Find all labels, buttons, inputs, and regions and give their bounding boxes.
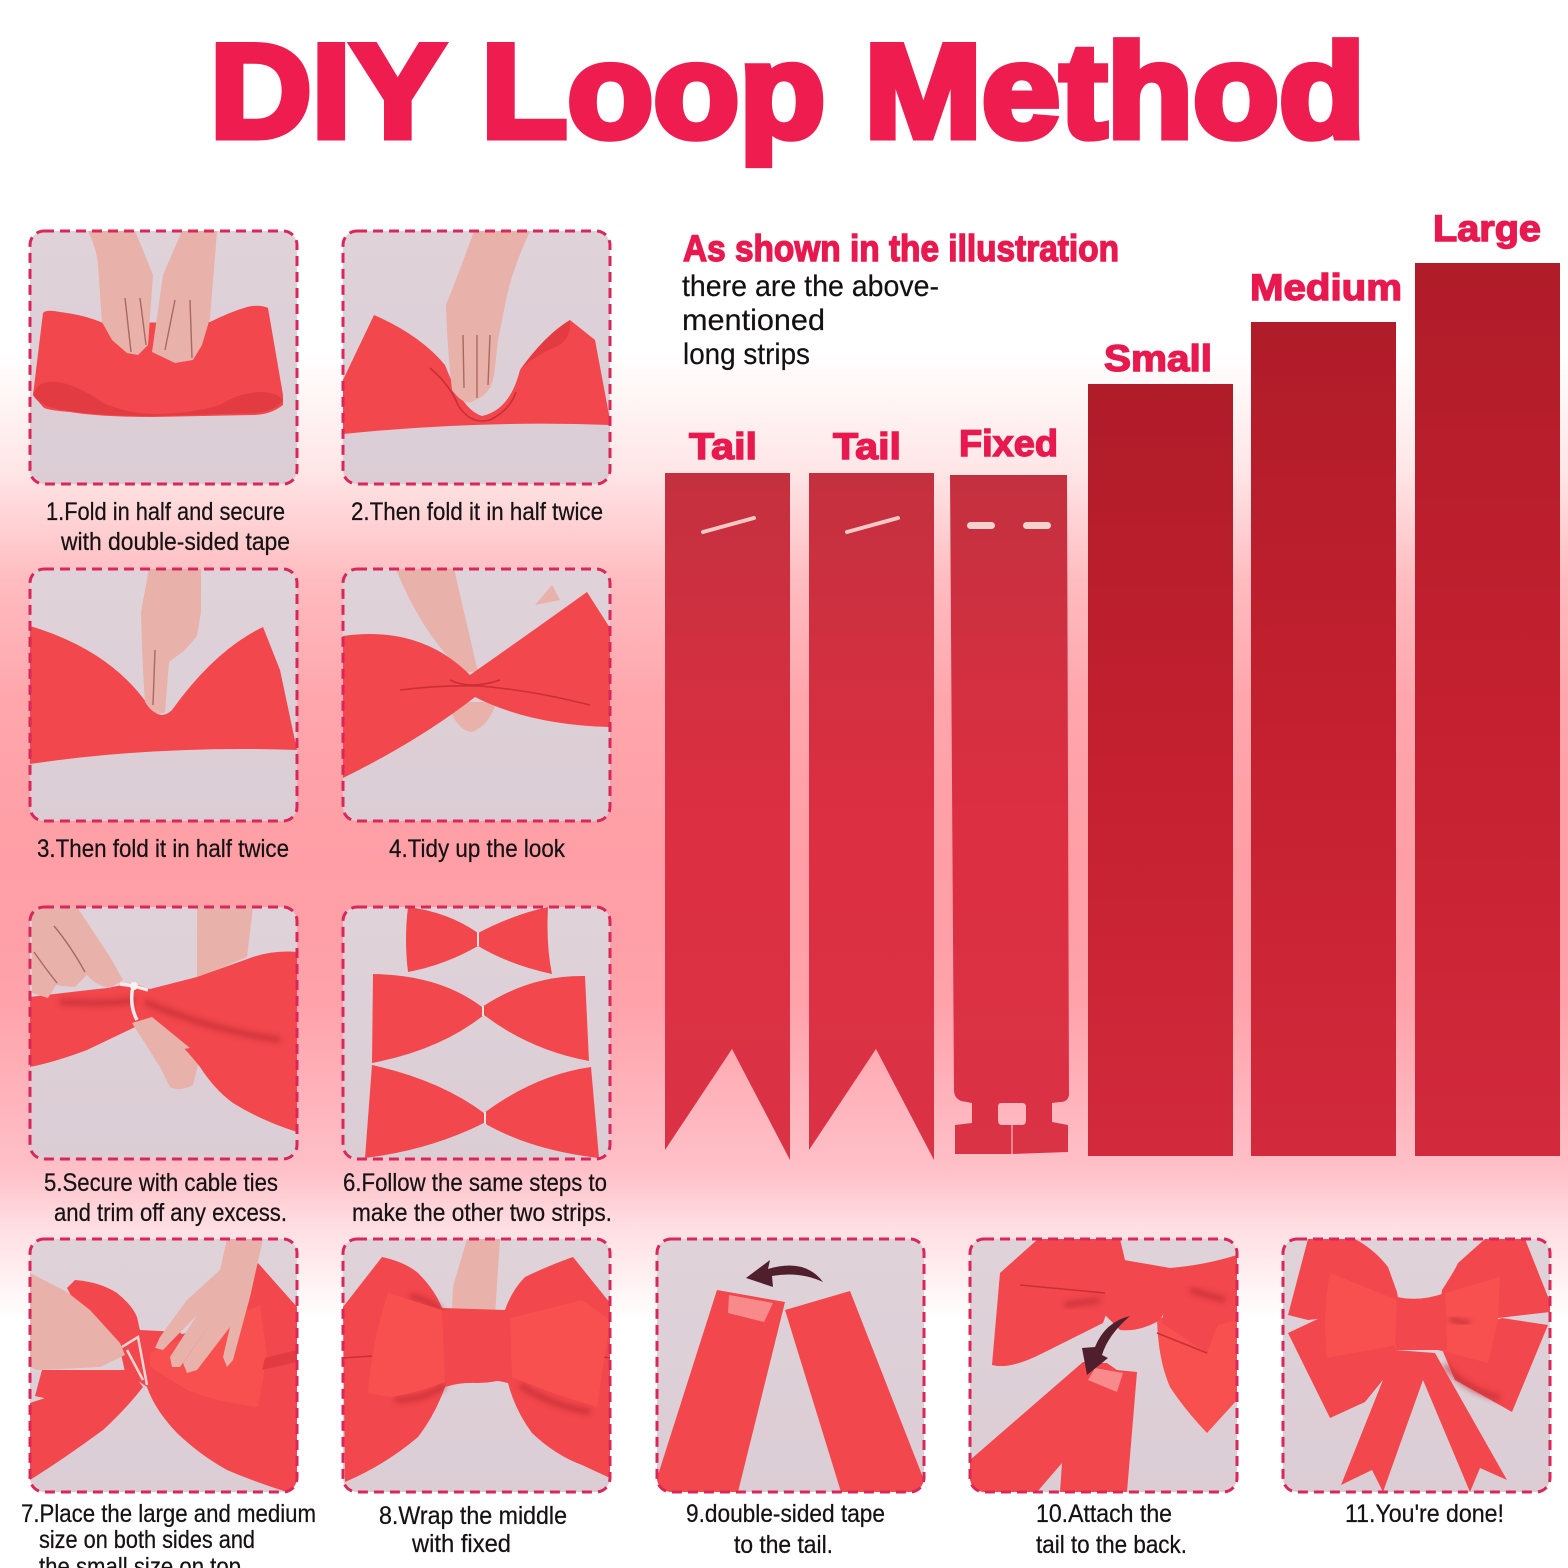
strip: fixed: Fixed xyxy=(959,423,1058,464)
step 8 caption xyxy=(379,1502,567,1558)
strip: tail one xyxy=(665,426,790,1160)
strip: tail two xyxy=(809,426,934,1160)
strip: large: Large xyxy=(1433,208,1541,249)
intro text block: As shown in the illustration xyxy=(683,228,1119,269)
step 8 caption: 8.Wrap the middle xyxy=(379,1502,567,1530)
step 5 caption: and trim off any excess. xyxy=(54,1199,287,1227)
step 5 caption: 5.Secure with cable ties xyxy=(44,1169,278,1197)
step 9 caption: 9.double-sided tape xyxy=(686,1500,885,1528)
panel: step 3 xyxy=(30,569,297,863)
step 9 caption xyxy=(686,1500,885,1559)
intro text block xyxy=(682,228,1119,371)
step 2 caption: 2.Then fold it in half twice xyxy=(351,498,603,526)
panel: step 10 xyxy=(970,1239,1237,1559)
panel: step 6 xyxy=(343,907,612,1227)
step 5 caption xyxy=(44,1169,287,1227)
step 1 caption: with double-sided tape xyxy=(60,528,290,556)
arrow: curved left xyxy=(746,1260,823,1287)
step 4 caption: 4.Tidy up the look xyxy=(389,835,565,863)
bow centre knot xyxy=(120,1330,182,1387)
step 6 caption xyxy=(343,1169,612,1227)
intro text block: long strips xyxy=(683,338,810,371)
step 10 caption: tail to the back. xyxy=(1036,1531,1187,1559)
intro text block: there are the above- xyxy=(682,270,939,303)
step 1 caption xyxy=(46,498,290,556)
arrow: curved down xyxy=(1082,1316,1130,1375)
step 3 caption: 3.Then fold it in half twice xyxy=(37,835,289,863)
panel: step 5 xyxy=(30,907,297,1227)
strip: large xyxy=(1415,208,1560,1156)
panel: step 9 xyxy=(657,1239,924,1559)
strip: medium xyxy=(1250,267,1402,1156)
intro text block: mentioned xyxy=(682,304,825,337)
strip: small: Small xyxy=(1104,338,1212,379)
strip: tail one: Tail xyxy=(689,426,757,467)
step 7 caption xyxy=(21,1500,316,1568)
panel: step 8 xyxy=(343,1239,611,1558)
panel: step 1 xyxy=(30,231,297,556)
step 9 caption: to the tail. xyxy=(734,1531,833,1559)
step 6 caption: make the other two strips. xyxy=(352,1199,612,1227)
panel: step 11 xyxy=(1283,1239,1550,1528)
title: DIY Loop Method xyxy=(210,18,1365,166)
panel: step 2 xyxy=(343,231,610,526)
step 8 caption: with fixed xyxy=(411,1530,511,1558)
step 10 caption xyxy=(1036,1500,1187,1559)
step 10 caption: 10.Attach the xyxy=(1036,1500,1172,1528)
step 1 caption: 1.Fold in half and secure xyxy=(46,498,285,526)
strip: medium: Medium xyxy=(1250,267,1402,308)
step 6 caption: 6.Follow the same steps to xyxy=(343,1169,607,1197)
step 7 caption: 7.Place the large and medium xyxy=(21,1500,316,1528)
panel: step 4 xyxy=(343,569,610,863)
strip: tail two: Tail xyxy=(833,426,901,467)
step 11 caption: 11.You're done! xyxy=(1345,1500,1504,1528)
strip: fixed xyxy=(950,423,1069,1154)
step 7 caption: size on both sides and xyxy=(39,1526,255,1554)
strip: small xyxy=(1088,338,1233,1156)
panel: step 7 xyxy=(21,1239,316,1568)
